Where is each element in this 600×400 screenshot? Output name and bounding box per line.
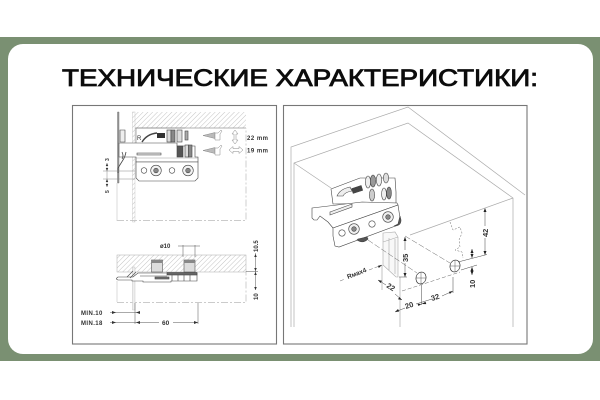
dimension: 10.5 and 10: 10	[254, 293, 260, 300]
title: ТЕХНИЧЕСКИЕ ХАРАКТЕРИСТИКИ:	[62, 65, 538, 92]
drilling guide lines	[340, 222, 463, 291]
label: 60: 60	[162, 320, 170, 327]
label: Rmax 4: Rмах4	[346, 267, 368, 281]
label: MIN.10: MIN.10	[81, 311, 103, 317]
dimension: diameter 10	[178, 245, 200, 257]
dimensions: 3 and 5: 3	[105, 158, 111, 161]
top view: hinge mechanism: R	[137, 136, 142, 142]
bottom view: hatched panel with dowels	[117, 255, 246, 310]
top view: hinge mechanism	[118, 112, 198, 183]
isometric hinge	[312, 173, 401, 247]
label: 32: 32	[430, 292, 441, 303]
dowel holes	[415, 259, 461, 285]
label: 10: 10	[468, 280, 477, 288]
dimension: 10.5 and 10: 10.5	[254, 240, 260, 252]
dimensions: 3 and 5: 5	[105, 190, 111, 193]
cabinet outline	[291, 107, 525, 327]
icons: adjustment screw symbols and arrows	[203, 130, 243, 155]
label: 20: 20	[404, 300, 415, 311]
arrowheads	[378, 208, 486, 312]
label: 42: 42	[481, 229, 490, 237]
label: MIN.18: MIN.18	[81, 321, 103, 327]
label: 22 mm: 22 mm	[247, 136, 269, 142]
dimension: 10.5 and 10	[246, 240, 260, 300]
top view: hatched cabinet panel	[117, 112, 246, 222]
label: diameter 10: ø10	[160, 244, 171, 250]
cutout block	[383, 232, 398, 277]
bottom view: hinge profile	[116, 271, 197, 282]
panel: side and top installation views	[72, 106, 276, 344]
dimensions: min 10, min 18 and 60	[110, 303, 198, 324]
dimension lines	[378, 210, 487, 312]
dimensions: 3 and 5	[103, 158, 135, 193]
label: 19 mm: 19 mm	[247, 148, 269, 154]
label: 22: 22	[385, 281, 397, 293]
white card	[8, 44, 593, 354]
label: 35: 35	[401, 254, 410, 262]
panel: isometric installation view	[284, 106, 527, 344]
